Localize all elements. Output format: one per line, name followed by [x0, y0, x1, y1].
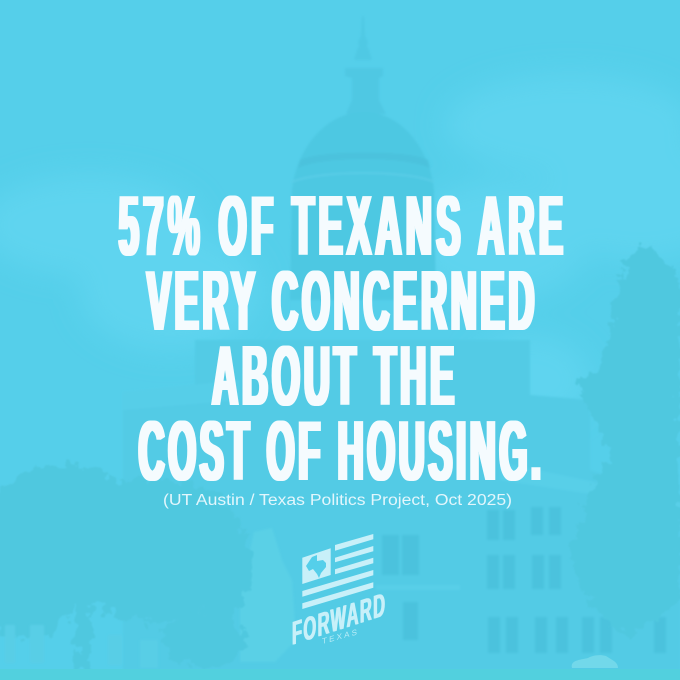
logo: Forward Texas: [292, 534, 385, 653]
ground: [0, 669, 680, 680]
spire: [354, 16, 372, 60]
lantern: [345, 68, 386, 114]
flag stripes: [302, 534, 373, 609]
wordmark TEXAS: TEXAS: [322, 628, 358, 646]
clouds: [0, 75, 680, 425]
dome: [290, 112, 436, 300]
headline: ABOUT THE: [212, 328, 454, 423]
building body: [123, 340, 680, 670]
car: [572, 655, 618, 668]
headline: COST OF HOUSING.: [139, 403, 541, 498]
wordmark FORWARD: FORWARD: [292, 585, 385, 653]
lower left wall: [5, 625, 158, 668]
left pavilion: [228, 528, 296, 662]
windows: [382, 507, 666, 653]
capitol building: [123, 16, 680, 670]
headline: [119, 178, 563, 498]
tree right: [570, 245, 680, 640]
trees left: [0, 465, 250, 670]
headline: 57% OF TEXANS ARE: [119, 178, 563, 273]
source citation: (UT Austin / Texas Politics Project, Oct 2025): [163, 492, 512, 509]
flag canton with Texas shape: [302, 548, 331, 584]
headline: VERY CONCERNED: [147, 253, 534, 348]
